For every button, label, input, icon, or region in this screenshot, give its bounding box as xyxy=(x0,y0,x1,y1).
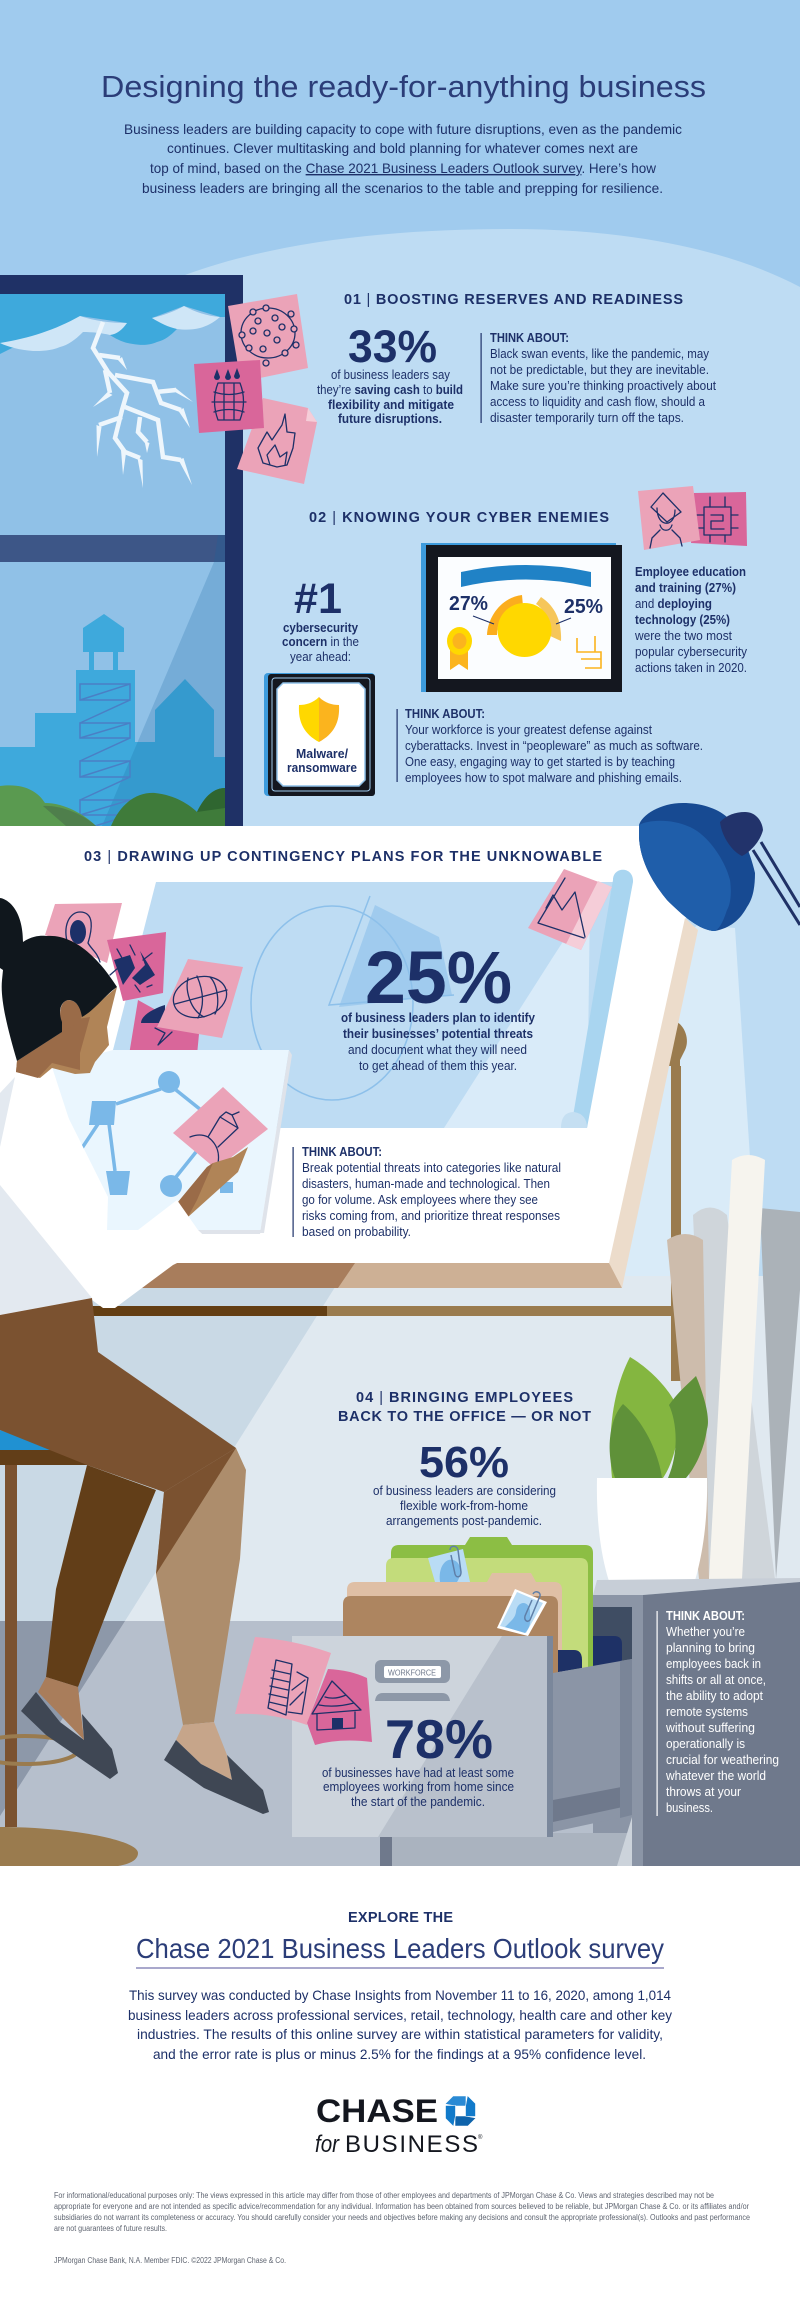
stat caption: and document what they will need xyxy=(348,1042,527,1057)
face xyxy=(16,987,117,1078)
disclaimer xyxy=(54,2191,750,2265)
think about 03: based on probability. xyxy=(302,1224,411,1239)
stat caption: their businesses’ potential threats xyxy=(343,1026,533,1041)
stat caption xyxy=(322,1765,514,1809)
think about 01: disaster temporarily turn off the taps. xyxy=(490,410,684,425)
actions text: Employee education xyxy=(635,564,746,579)
background: room xyxy=(0,826,800,1866)
rolled plans xyxy=(667,1155,800,1579)
cybersecurity caption: cybersecurity xyxy=(283,620,359,635)
think about 04: the ability to adopt xyxy=(666,1688,763,1703)
think about 02: Your workforce is your greatest defense against xyxy=(405,722,652,737)
stat 33%: 33% xyxy=(348,321,437,372)
stat caption: future disruptions. xyxy=(338,411,442,426)
actions text: and training (27%) xyxy=(635,580,736,595)
think about 04: operationally is xyxy=(666,1736,745,1751)
thigh xyxy=(0,1298,236,1492)
stat caption xyxy=(341,1010,536,1073)
card: malware: ransomware xyxy=(287,760,357,775)
actions text: technology (25%) xyxy=(635,612,730,627)
open drawer xyxy=(292,1636,632,1837)
screen: actions chart: 27% xyxy=(449,593,488,615)
tablet with network xyxy=(52,1050,292,1234)
stat caption: employees working from home since xyxy=(323,1779,514,1794)
person xyxy=(0,898,292,1866)
title: Designing the ready-for-anything business xyxy=(101,69,706,104)
heading 04 xyxy=(338,1390,591,1425)
heading 03: 03 | DRAWING UP CONTINGENCY PLANS FOR THE UNKNOWABLE xyxy=(84,849,602,865)
section 03 xyxy=(45,849,612,1239)
think about 01: Black swan events, like the pandemic, may xyxy=(490,346,709,361)
think about 03: THINK ABOUT: xyxy=(302,1144,382,1159)
think about 04: shifts or all at once, xyxy=(666,1672,766,1687)
sticky note: globe xyxy=(157,959,243,1038)
think about 03: Break potential threats into categories like natural xyxy=(302,1160,561,1175)
think about 01 xyxy=(480,330,716,425)
stat 78%: 78% xyxy=(385,1708,493,1770)
card: malware: Malware/ xyxy=(296,746,348,761)
think about 01: Make sure you’re thinking proactively about xyxy=(490,378,716,393)
think about 03: go for volume. Ask employees where they see xyxy=(302,1192,538,1207)
think about 04: business. xyxy=(666,1800,713,1815)
background: sky header xyxy=(0,0,800,830)
disclaimer: are not guarantees of future results. xyxy=(54,2224,167,2233)
think about 02: employees how to spot malware and phishing emails. xyxy=(405,770,682,785)
back leg xyxy=(46,1465,156,1687)
blueprint roll xyxy=(571,870,633,1128)
think about 04: without suffering xyxy=(665,1720,755,1735)
stat caption xyxy=(373,1483,556,1528)
disclaimer: JPMorgan Chase Bank, N.A. Member FDIC. ©2022 JPMorgan Chase & Co. xyxy=(54,2256,286,2265)
hair xyxy=(0,898,117,1061)
think about 01: not be predictable, but they are inevitable. xyxy=(490,362,709,377)
blueprint xyxy=(113,870,633,1128)
logo: Chase for Business: CHASE xyxy=(316,2093,438,2129)
sticky note: lighthouse xyxy=(173,1087,268,1169)
footer panel xyxy=(0,1866,800,2311)
section 01 xyxy=(317,292,716,426)
sticky note: ear xyxy=(45,903,122,963)
plant pot xyxy=(597,1478,707,1587)
think about 04: crucial for weathering xyxy=(666,1752,779,1767)
hand xyxy=(178,1147,248,1217)
think about 04: planning to bring xyxy=(666,1640,755,1655)
cybersecurity caption xyxy=(282,620,359,664)
sticky note: house xyxy=(307,1669,372,1745)
intro text: business leaders are bringing all the scenarios to the table and prepping for resilience. xyxy=(142,180,663,196)
think about 02: THINK ABOUT: xyxy=(405,706,485,721)
screen: actions chart: 25% xyxy=(564,596,603,618)
intro text: Business leaders are building capacity to cope with future disruptions, even as the pandemic xyxy=(124,121,682,137)
think about 04: THINK ABOUT: xyxy=(666,1608,745,1623)
front lower leg xyxy=(156,1448,246,1725)
photo clip xyxy=(497,1589,547,1636)
survey paragraph xyxy=(128,1987,672,2062)
shirt xyxy=(0,1068,214,1318)
think about 02: cyberattacks. Invest in “peopleware” as much as software. xyxy=(405,738,703,753)
think about 03: risks coming from, and prioritize threat responses xyxy=(302,1208,560,1223)
cybersecurity caption: concern in the xyxy=(282,634,359,649)
stat caption: to get ahead of them this year. xyxy=(359,1058,517,1073)
drawer label xyxy=(375,1660,450,1683)
stat caption: flexible work-from-home xyxy=(400,1498,528,1513)
think about 04: Whether you’re xyxy=(666,1624,745,1639)
actions text: were the two most xyxy=(634,628,732,643)
front foot xyxy=(164,1722,269,1814)
drawer label: WORKFORCE xyxy=(388,1668,436,1678)
stat caption: of businesses have had at least some xyxy=(322,1765,514,1780)
sticky note: virus xyxy=(228,294,308,378)
actions text: actions taken in 2020. xyxy=(635,660,747,675)
think about 04: remote systems xyxy=(666,1704,748,1719)
think about 03 xyxy=(292,1144,561,1239)
think about 04: throws at your xyxy=(666,1784,742,1799)
think about 04: whatever the world xyxy=(665,1768,766,1783)
plant xyxy=(597,1357,708,1587)
heading 01: 01 | BOOSTING RESERVES AND READINESS xyxy=(344,292,683,308)
stat caption: of business leaders are considering xyxy=(373,1483,556,1498)
sticky note: fire xyxy=(237,398,317,484)
icon: award ribbon xyxy=(447,627,472,670)
card: malware xyxy=(264,673,375,796)
logo: Chase for Business: ® xyxy=(478,2134,483,2141)
sticky notes: reserves xyxy=(194,294,317,484)
think about 04: employees back in xyxy=(666,1656,761,1671)
stat #1: #1 xyxy=(294,575,342,623)
intro text: top of mind, based on the Chase 2021 Business Leaders Outlook survey. Here’s how xyxy=(150,160,657,176)
stat caption xyxy=(317,367,463,426)
sticky note: lightning xyxy=(129,1000,199,1055)
stat caption: they’re saving cash to build xyxy=(317,382,463,397)
think about 04 xyxy=(656,1608,779,1816)
screen: actions chart xyxy=(421,543,622,692)
back foot xyxy=(21,1677,118,1779)
cybersecurity caption: year ahead: xyxy=(290,649,351,664)
think about 02: One easy, engaging way to get started is by teaching xyxy=(405,754,675,769)
survey paragraph: and the error rate is plus or minus 2.5% for the findings at a 95% confidence level. xyxy=(153,2046,646,2062)
icon: shield xyxy=(299,697,339,742)
stat caption: of business leaders plan to identify xyxy=(341,1010,536,1025)
folders xyxy=(343,1537,622,1675)
sticky note: barrel xyxy=(194,360,264,433)
heading 04: BACK TO THE OFFICE — OR NOT xyxy=(338,1409,591,1425)
survey paragraph: business leaders across professional services, retail, technology, health care and other key xyxy=(128,2007,672,2023)
actions text xyxy=(634,564,747,675)
disclaimer: For informational/educational purposes only: The views expressed in this article may differ from those of other employees and departments of JPMorgan Chase & Co. Views and strategies described may not be xyxy=(54,2191,714,2200)
logo: Chase for Business: for xyxy=(315,2131,340,2158)
stat caption: of business leaders say xyxy=(331,367,450,382)
actions text: and deploying xyxy=(635,596,712,611)
survey link: Chase 2021 Business Leaders Outlook survey xyxy=(136,1933,664,1964)
intro text xyxy=(124,121,682,196)
explore heading: EXPLORE THE xyxy=(348,1910,453,1926)
stool xyxy=(0,1430,138,1866)
think about 01: access to liquidity and cash flow, should a xyxy=(490,394,706,409)
logo: Chase for Business xyxy=(315,2093,483,2158)
sticky note: building xyxy=(235,1637,331,1725)
think about 02 xyxy=(396,706,703,785)
stat caption: the start of the pandemic. xyxy=(351,1794,485,1809)
lamp xyxy=(639,803,800,931)
survey paragraph: industries. The results of this online survey are within statistical parameters for validity, xyxy=(137,2026,663,2042)
icon: Chase octagon xyxy=(445,2096,476,2126)
actions text: popular cybersecurity xyxy=(635,644,747,659)
sticky note: chart xyxy=(528,869,612,950)
stat 56%: 56% xyxy=(419,1438,509,1487)
stat caption: flexibility and mitigate xyxy=(328,397,454,412)
logo: Chase for Business: BUSINESS xyxy=(345,2131,478,2158)
section 02 xyxy=(264,486,747,796)
section 04 xyxy=(322,1390,779,1816)
heading 04: 04 | BRINGING EMPLOYEES xyxy=(356,1390,573,1406)
drawer handle xyxy=(375,1693,450,1701)
desk xyxy=(92,918,698,1381)
filing cabinet xyxy=(380,1578,800,1866)
sticky note: circuit xyxy=(107,932,166,1001)
illustration: window with storm and city xyxy=(0,275,243,826)
intro text: continues. Clever multitasking and bold planning for whatever comes next are xyxy=(167,140,638,156)
sticky note: chip xyxy=(691,492,747,546)
think about 03: disasters, human-made and technological. Then xyxy=(302,1176,550,1191)
think about 01: THINK ABOUT: xyxy=(490,330,569,345)
sticky note: graduate xyxy=(638,486,700,550)
photo clip xyxy=(428,1546,470,1582)
heading 02: 02 | KNOWING YOUR CYBER ENEMIES xyxy=(309,510,609,526)
icon: circuit xyxy=(577,636,601,668)
stat caption: arrangements post-pandemic. xyxy=(386,1513,542,1528)
survey paragraph: This survey was conducted by Chase Insights from November 11 to 16, 2020, among 1,014 xyxy=(129,1987,671,2003)
stat 25%: 25% xyxy=(365,936,512,1019)
